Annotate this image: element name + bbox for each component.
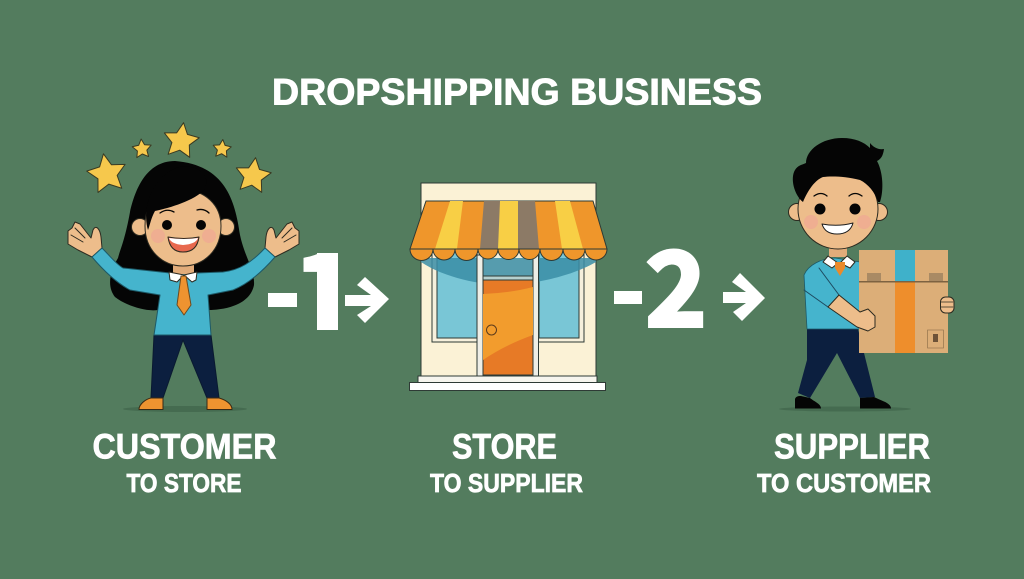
neck: [829, 245, 847, 257]
label: customer to store: TO STORE: [126, 470, 242, 498]
lower step: [410, 382, 606, 390]
window frame: [432, 250, 584, 342]
icon: rating stars: [84, 120, 273, 194]
collar: [169, 272, 197, 282]
hair: [793, 138, 884, 202]
necktie: [177, 276, 191, 315]
awning scallops: [410, 249, 607, 260]
left hand: [68, 222, 102, 257]
door highlight: [483, 287, 533, 360]
awning stripes: [435, 201, 583, 249]
awning: [410, 201, 607, 249]
number 1 stem reinforcement: [317, 253, 338, 330]
eyes: [162, 220, 172, 230]
forearm and hand: [828, 295, 875, 331]
shipping box: [859, 250, 948, 353]
label: store to supplier: [430, 428, 583, 498]
ground shadow: [123, 406, 247, 412]
ears: [132, 218, 234, 236]
box handle marks: [867, 273, 943, 281]
shoes: [795, 396, 891, 408]
box tape blue: [895, 250, 915, 282]
number 1: 1: [295, 209, 356, 358]
connector: step one arrow: [268, 253, 389, 330]
arrow 1: [345, 277, 389, 323]
label glyph: [933, 334, 938, 342]
label: store to supplier: STORE: [452, 428, 557, 466]
door transom: [483, 276, 533, 281]
figure: happy customer: [68, 120, 299, 412]
face: [145, 189, 221, 266]
shirt: [804, 258, 860, 329]
ground shadow: [779, 406, 911, 412]
awning band line: [410, 248, 607, 250]
fringe: [146, 166, 206, 230]
arrow 2: [723, 273, 765, 321]
eyebrows: [160, 209, 209, 213]
door knob: [486, 325, 496, 335]
figure: storefront: [410, 183, 607, 390]
right window: [539, 250, 579, 338]
smile: [822, 223, 853, 234]
label: supplier to customer: TO CUSTOMER: [757, 470, 931, 498]
box label: [928, 330, 944, 348]
orange door: [483, 280, 533, 375]
door posts: [477, 255, 483, 376]
label: supplier to customer: SUPPLIER: [774, 428, 930, 466]
left window: [437, 250, 477, 338]
building wall: [421, 183, 596, 376]
neck: [173, 258, 194, 274]
awning shadow: [421, 258, 596, 285]
cheeks: [804, 215, 818, 229]
necktie knot: [835, 262, 845, 276]
number 2: 2: [646, 207, 706, 356]
box tape orange: [895, 282, 915, 353]
eyebrows: [814, 194, 862, 196]
eyes: [814, 204, 826, 214]
sleeve lines: [804, 268, 839, 307]
trousers: [151, 335, 219, 398]
upper step: [418, 376, 597, 383]
connector: step two arrow: [614, 207, 765, 356]
label: customer to store: [92, 428, 276, 498]
shoes: [139, 398, 232, 410]
box seam: [859, 281, 948, 282]
right hand: [940, 297, 954, 313]
trousers: [798, 329, 875, 398]
ears: [788, 204, 888, 220]
collar: [823, 256, 855, 268]
long hair: [110, 161, 254, 310]
blue shirt with raised arms: [92, 248, 275, 335]
label: supplier to customer: [757, 428, 931, 498]
figure: supplier carrying box: [779, 138, 954, 412]
right hand: [265, 222, 299, 257]
cheeks: [151, 229, 165, 243]
smile: [168, 237, 199, 252]
face: [798, 169, 878, 249]
title: DROPSHIPPING BUSINESS: [272, 70, 762, 112]
label: store to supplier: TO SUPPLIER: [430, 470, 583, 498]
label: customer to store: CUSTOMER: [92, 428, 276, 466]
